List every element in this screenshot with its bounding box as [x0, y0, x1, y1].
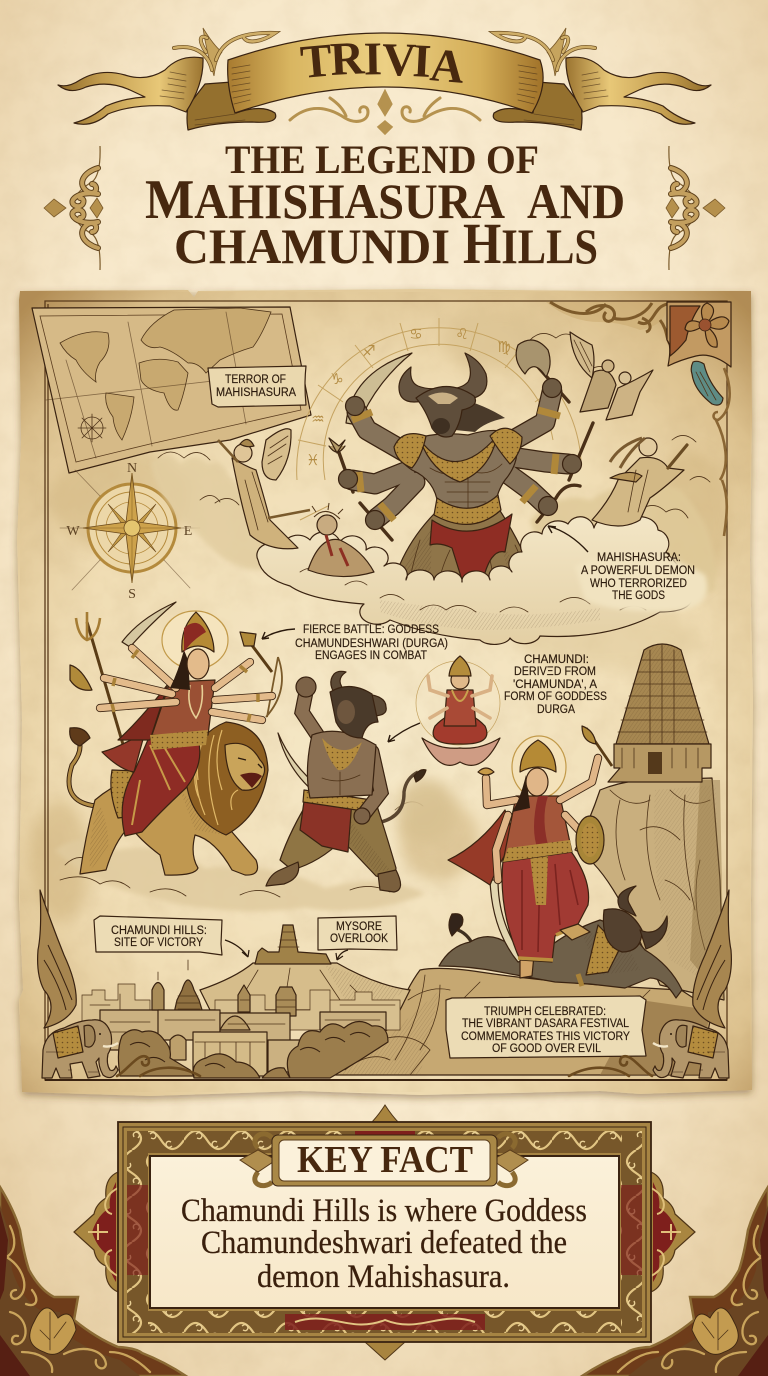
- trousers: [388, 503, 540, 604]
- arms: [302, 692, 322, 742]
- horns: [618, 886, 667, 949]
- left leg: [520, 955, 534, 978]
- arrow: to Mahishasura: [548, 526, 588, 552]
- title: THE LEGEND OF: [225, 137, 539, 182]
- label: triumph celebrated: COMMEMORATES THIS VICTORY: [461, 1031, 630, 1043]
- flowing hair: [455, 398, 505, 432]
- ornament: title side right: [666, 146, 725, 270]
- rock ledge and cliff: [323, 968, 712, 1075]
- label: terror of Mahishasura: [208, 366, 306, 407]
- icon: gopuram temple: [608, 644, 711, 782]
- body: [439, 920, 682, 998]
- label: Chamundi Hills: SITE OF VICTORY: [114, 937, 203, 949]
- ornament: title side left: [44, 146, 103, 270]
- foliage: [118, 1021, 388, 1078]
- arms: [100, 648, 272, 720]
- arrow: to hilltop: [336, 950, 348, 960]
- zodiac signs: ♓: [306, 451, 320, 469]
- front cloud under Mahishasura: [257, 517, 693, 644]
- label: Chamundi derivation: FORM OF GODDESS: [504, 691, 607, 703]
- zodiac signs: ♒: [311, 410, 325, 428]
- label: triumph celebrated: TRIUMPH CELEBRATED:: [484, 1006, 606, 1018]
- label: Mahishasura: THE GODS: [612, 590, 665, 602]
- horns: [399, 367, 440, 402]
- bottom crest: [365, 1342, 405, 1360]
- torso: [398, 430, 517, 512]
- icon: shield: [576, 816, 604, 864]
- compass rose: [60, 461, 200, 602]
- corner ornament top right: [546, 302, 731, 536]
- label: triumph celebrated: [446, 996, 646, 1058]
- right foot on demon: [560, 924, 590, 940]
- hair and face: [170, 650, 190, 690]
- parchment stains: [30, 310, 730, 920]
- torso: [307, 731, 376, 798]
- heading: trivia: TRIVIA: [298, 32, 466, 94]
- label: Chamundi derivation: DERIVΞD FROM: [514, 666, 596, 678]
- hands: [338, 378, 582, 530]
- lion body: [80, 770, 258, 875]
- compass letters: S: [128, 587, 136, 602]
- tail: [456, 918, 475, 950]
- bodice: [503, 796, 572, 862]
- heading: key fact: KEY FACT: [297, 1139, 473, 1181]
- key fact side medallion right: [651, 1172, 695, 1292]
- compass letters: N: [127, 461, 137, 476]
- head: [512, 775, 530, 812]
- figure: slain buffalo demon: [439, 886, 682, 998]
- frame: [118, 1122, 651, 1342]
- figure: small seated goddess: [416, 656, 500, 765]
- background skyline: [82, 984, 400, 1030]
- label: Mysore overlook: MYSORE: [336, 921, 382, 933]
- bottom corner ornament left: [0, 1187, 186, 1376]
- bottom curls: [117, 1056, 652, 1076]
- label: Chamundi derivation: 'CHAMUNDA', A: [513, 679, 597, 691]
- frame corner scrolls: [38, 890, 731, 1080]
- label: Mahishasura: [575, 552, 707, 611]
- label: terror of Mahishasura: TERROR OF: [225, 374, 286, 386]
- arrow: to Durga: [262, 629, 295, 639]
- head: [330, 686, 378, 738]
- title: [145, 137, 625, 276]
- label: Chamundi Hills: [94, 916, 222, 955]
- ribbon central band: [228, 33, 543, 113]
- bangles: [112, 650, 258, 722]
- inner frame: [45, 301, 727, 1080]
- arms outline: [352, 392, 568, 518]
- compass letters: [66, 461, 192, 602]
- label: fierce battle: ENGAGES IN COMBAT: [315, 650, 427, 662]
- bodice: [152, 680, 215, 735]
- zodiac wheel: [297, 318, 581, 520]
- red sash: [430, 514, 512, 584]
- label: fierce battle: FIERCE BATTLE: GODDESS: [303, 624, 439, 636]
- arms: [486, 758, 598, 880]
- figure: Durga on lion: [69, 602, 282, 875]
- label: fierce battle: [295, 624, 448, 662]
- clouds behind figures: [150, 333, 716, 608]
- ribbon hatching: [160, 65, 608, 125]
- zodiac signs: [306, 325, 511, 469]
- icon: elephant right: [653, 1020, 729, 1078]
- weapons: [87, 622, 272, 775]
- key fact plaque: [240, 1134, 528, 1186]
- panel: parchment illustration: [17, 289, 753, 1096]
- figure: fleeing goddess right: [592, 438, 687, 526]
- frame ornament bands: [127, 1131, 642, 1333]
- wrist cuffs: [352, 410, 560, 520]
- label: terror of Mahishasura: MAHISHASURA: [216, 387, 296, 399]
- horns: [331, 671, 346, 698]
- weapons: [346, 353, 412, 425]
- head: [603, 909, 642, 952]
- label: Mysore overlook: [318, 916, 397, 950]
- clouds under battle: [55, 780, 455, 911]
- shaded rock: [690, 780, 724, 1000]
- collar: [586, 925, 620, 975]
- icon: lotus: [478, 768, 494, 775]
- compass letters: W: [66, 524, 80, 539]
- zodiac signs: ♌: [455, 325, 469, 343]
- ribbon tail right: [493, 57, 711, 130]
- ornament: flourish above ribbon left: [174, 28, 275, 76]
- key fact side medallion left: [74, 1172, 118, 1292]
- key fact text: Chamundi Hills is where Goddess: [181, 1193, 587, 1229]
- tail: [367, 772, 418, 824]
- label: Mahishasura: A POWERFUL DEMON: [581, 565, 695, 577]
- hill: [200, 963, 410, 1010]
- sword: [490, 880, 525, 962]
- arrow: to hill: [225, 940, 249, 957]
- label: fierce battle: CHAMUNDESHWARI (DURGA): [295, 638, 448, 650]
- figures: winged gods upper right: [570, 332, 653, 420]
- map: [32, 307, 311, 473]
- cape: [448, 810, 515, 885]
- compass letters: E: [184, 524, 192, 539]
- arrow: to demon: [388, 723, 420, 742]
- buildings: [100, 980, 386, 1076]
- halo: [162, 611, 228, 669]
- trousers: [280, 795, 396, 880]
- title: MAHISHASURA: [145, 169, 505, 231]
- icon: elephant left: [42, 1020, 118, 1078]
- lion mane: [186, 722, 268, 835]
- label: Chamundi derivation: CHAMUNDI:: [524, 654, 589, 666]
- arm bangle: [578, 974, 582, 986]
- label: triumph celebrated: OF GOOD OVER EVIL: [492, 1043, 602, 1055]
- label: triumph celebrated: THE VIBRANT DASARA FESTIVAL: [462, 1018, 630, 1030]
- map mini compass: [78, 414, 106, 442]
- panel interior: [150, 1156, 619, 1308]
- key fact text: Chamundeshwari defeated the: [201, 1225, 567, 1261]
- top crest: [344, 1105, 426, 1136]
- head: [416, 386, 476, 437]
- zodiac signs: ♐: [362, 342, 376, 360]
- ribbon tail left: [58, 57, 276, 130]
- label: Chamundi Hills: CHAMUNDI HILLS:: [111, 925, 207, 937]
- key fact text: [181, 1193, 587, 1295]
- figure: victorious goddess: [448, 726, 612, 978]
- ornament: flourish below ribbon: [290, 92, 480, 133]
- zodiac signs: ♋: [409, 325, 423, 343]
- title: CHAMUNDI: [174, 218, 450, 274]
- sword: [278, 733, 358, 816]
- figure: fallen old god: [308, 503, 374, 577]
- feet: [266, 862, 401, 892]
- ornament: flourish above ribbon right: [494, 28, 595, 76]
- banner: trivia ribbon: [58, 28, 711, 133]
- figure: winged goddess left: [218, 429, 310, 549]
- label: Mysore overlook: OVERLOOK: [330, 933, 388, 945]
- rock cliff under temple: [575, 778, 724, 1000]
- label: Mahishasura: WHO TERRORIZED: [590, 578, 687, 590]
- skirt: [122, 730, 200, 836]
- saddle: [111, 770, 162, 818]
- gold armour: [420, 436, 497, 482]
- mace: [586, 728, 612, 766]
- city of Mysore: [82, 925, 410, 1078]
- bottom corner ornament right: [582, 1187, 768, 1376]
- label: Chamundi derivation: DURGA: [537, 704, 575, 716]
- lion face: [225, 743, 265, 790]
- parchment sheet: [17, 289, 753, 1096]
- parchment grain: [20, 292, 750, 1092]
- skirt: [502, 850, 589, 962]
- zodiac signs: ♍: [497, 338, 511, 356]
- hilltop temple: [255, 925, 331, 964]
- icon: peacock: [691, 361, 723, 405]
- key fact text: demon Mahishasura.: [257, 1259, 510, 1295]
- figure: demon fighting: [266, 671, 426, 892]
- figure: Mahishasura: [329, 340, 593, 604]
- title: HILLS: [463, 211, 598, 276]
- panel: key fact: [0, 1105, 768, 1376]
- zodiac signs: ♑: [330, 370, 344, 388]
- title: AND: [527, 173, 625, 229]
- label: Chamundi derivation: [504, 654, 607, 716]
- lion tail: [69, 738, 96, 806]
- label: Mahishasura: MAHISHASURA:: [597, 552, 681, 564]
- halo: [512, 736, 566, 798]
